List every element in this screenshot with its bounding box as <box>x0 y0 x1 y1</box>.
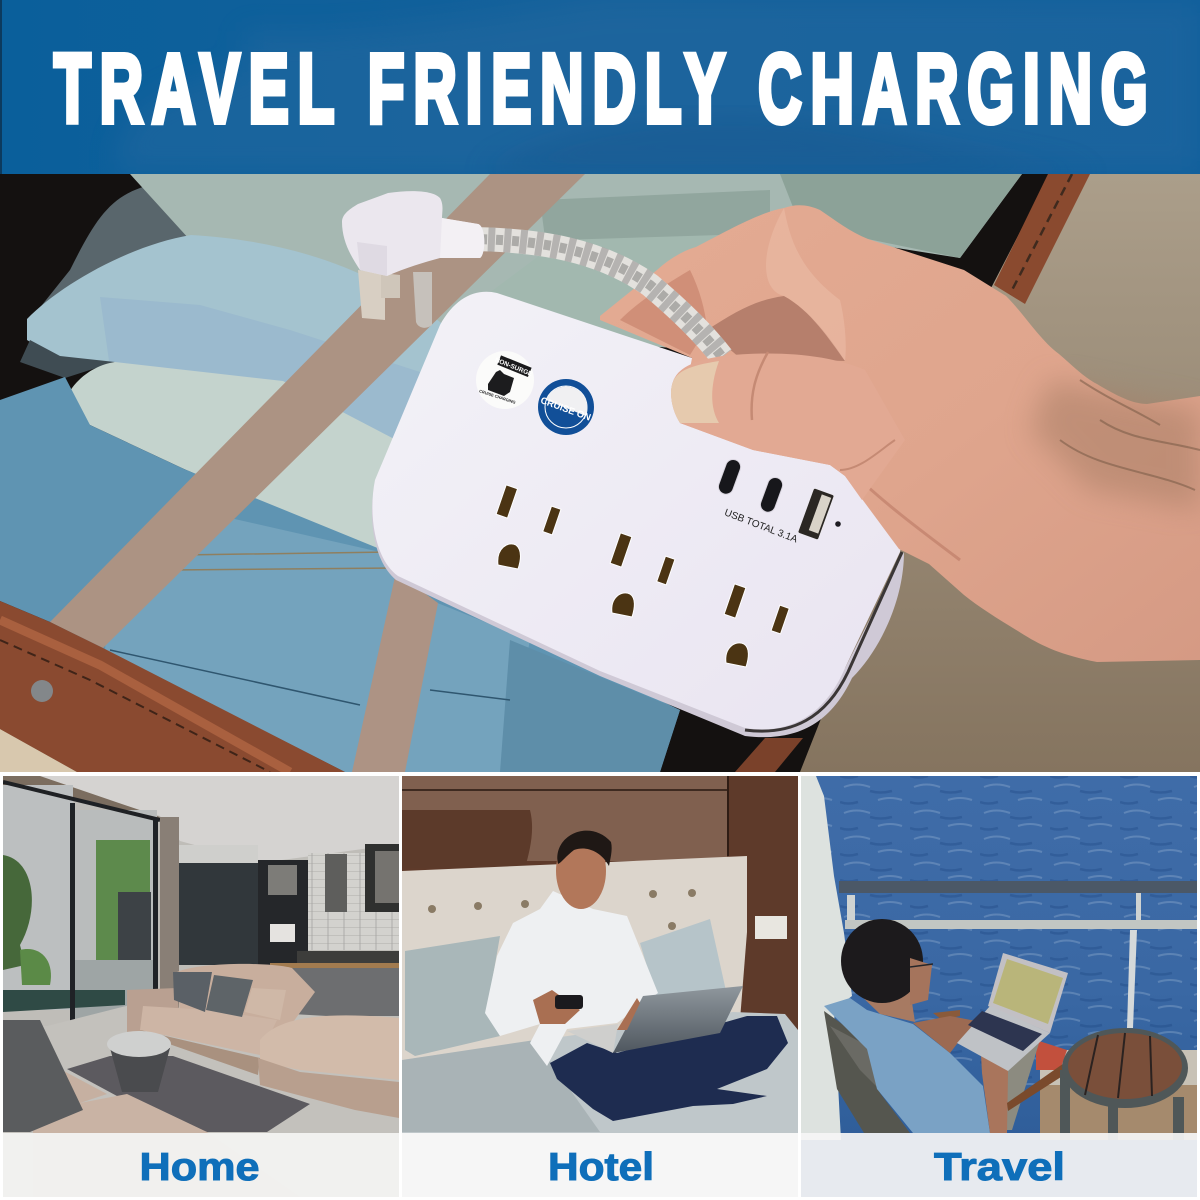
dark jeans <box>0 377 680 772</box>
main photo: packed suitcase with power strip <box>0 174 1200 772</box>
suitcase rim right <box>994 174 1090 304</box>
side table <box>1062 1028 1188 1140</box>
dining set <box>270 963 399 970</box>
chair <box>824 1011 910 1133</box>
laptop <box>957 953 1068 1071</box>
caption band <box>402 1133 798 1197</box>
suitcase leather rim <box>0 601 345 772</box>
floor background <box>0 174 1200 772</box>
arms <box>913 1016 992 1053</box>
strip underside <box>372 480 904 737</box>
tan strap vertical <box>352 572 438 772</box>
folded sage top cloth <box>130 174 1022 350</box>
pale green fold <box>65 362 400 560</box>
deck <box>1040 1085 1197 1140</box>
headboard <box>402 856 747 1060</box>
sticker: surge badge <box>476 351 534 409</box>
sofa <box>127 964 399 1118</box>
balcony posts <box>847 895 855 925</box>
rivet <box>31 680 53 702</box>
pants and armrests <box>1006 1040 1040 1130</box>
title: TRAVEL FRIENDLY CHARGING <box>54 35 1157 144</box>
plants <box>3 855 32 970</box>
tiled wall <box>308 853 399 950</box>
plug head <box>342 191 484 328</box>
outlet 3 <box>724 584 789 667</box>
shirt <box>824 998 990 1133</box>
legs <box>550 1016 788 1121</box>
window frames <box>3 782 160 820</box>
sticker: cruise on: CRUISE ON <box>539 395 592 424</box>
balcony rail <box>839 881 1197 893</box>
second window <box>179 863 258 965</box>
laptop <box>567 1024 618 1053</box>
pillar <box>160 817 179 1012</box>
floor <box>3 1005 399 1197</box>
patio view <box>3 785 73 801</box>
man <box>485 831 788 1121</box>
head <box>556 833 606 909</box>
panel: travel <box>801 776 1197 1197</box>
coffee table <box>107 1031 171 1092</box>
armrest <box>1007 1061 1075 1111</box>
strip body <box>372 292 901 729</box>
label: travel: Travel <box>934 1146 1065 1189</box>
outlet 2 <box>610 533 675 617</box>
outlet 1 <box>496 485 561 569</box>
sea <box>801 776 1197 1197</box>
usb ports: USB TOTAL 3.1A <box>723 507 799 546</box>
header banner <box>0 0 1200 174</box>
side wall <box>801 776 852 1140</box>
label: home: Home <box>140 1146 260 1189</box>
tan strap diagonal <box>50 174 585 648</box>
shaded denim at back <box>41 187 186 306</box>
light denim fold <box>27 235 441 375</box>
rug <box>67 1056 310 1132</box>
pillows <box>405 936 500 1056</box>
usb ports <box>716 457 841 546</box>
caption band <box>3 1133 399 1197</box>
hand <box>600 205 1200 662</box>
ceiling <box>30 776 399 863</box>
kitchen shelving <box>258 860 308 967</box>
thumb <box>671 352 905 500</box>
wood wall <box>402 776 798 1056</box>
wall plate <box>755 916 787 939</box>
shirt <box>485 891 658 1066</box>
phone hand <box>533 990 580 1024</box>
power strip <box>372 292 904 737</box>
label: hotel: Hotel <box>548 1146 654 1189</box>
man <box>824 919 1008 1133</box>
panel: hotel <box>402 776 798 1197</box>
foreground sofa and cushion <box>33 1094 300 1197</box>
wrist hair shading <box>1030 380 1200 510</box>
bed <box>402 1012 798 1197</box>
panel: home <box>3 776 399 1197</box>
suitcase interior <box>0 174 1050 772</box>
palm shadow between fingers <box>707 296 845 361</box>
power cord <box>472 239 722 357</box>
caption band <box>801 1133 1197 1197</box>
sticker: surge badge: CRUISE CHARGING <box>479 388 516 405</box>
sticker: cruise on <box>538 379 594 435</box>
sticker: surge badge: NON-SURGE <box>494 357 534 378</box>
